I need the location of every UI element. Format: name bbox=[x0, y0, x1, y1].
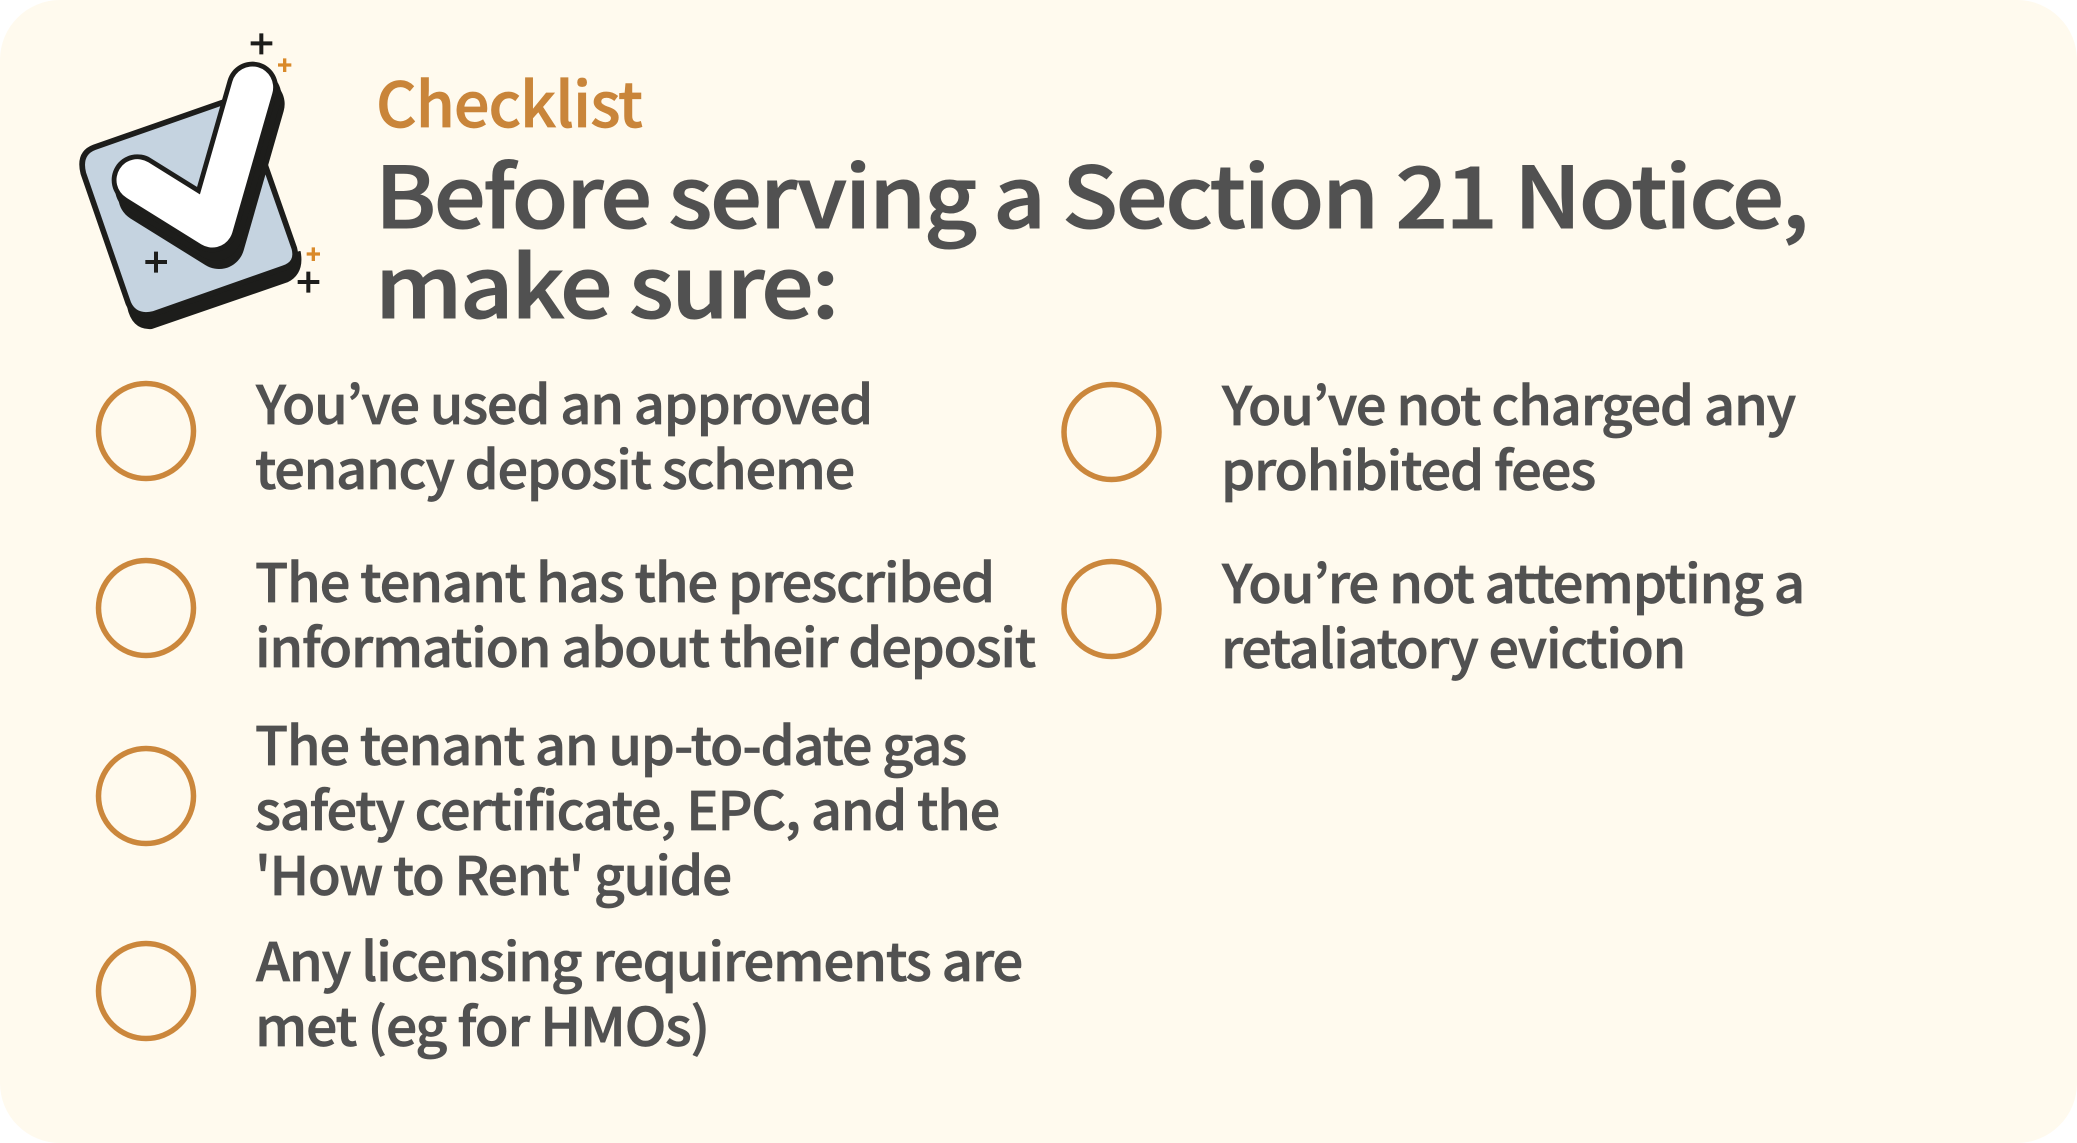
title bbox=[375, 130, 1807, 343]
checklist item: prohibited fees: prohibited fees bbox=[1221, 430, 1595, 506]
checklist item: licensing: Any licensing requirements are bbox=[256, 921, 1022, 997]
checklist item: deposit scheme: You’ve used an approved bbox=[255, 364, 872, 440]
title: make sure: bbox=[375, 220, 837, 343]
checklist item: prescribed information: information about their deposit bbox=[255, 607, 1036, 683]
title: Before serving a Section 21 Notice, bbox=[375, 130, 1807, 253]
checklist item: prohibited fees: You’ve not charged any bbox=[1221, 365, 1796, 441]
checklist item: prescribed information bbox=[98, 542, 1036, 683]
checklist item: retaliatory eviction bbox=[1064, 543, 1804, 684]
checklist item: deposit scheme: tenancy deposit scheme bbox=[255, 429, 854, 505]
checklist item: licensing bbox=[98, 921, 1022, 1062]
checklist item: retaliatory eviction: retaliatory eviction bbox=[1221, 608, 1685, 684]
checklist item: retaliatory eviction: You’re not attempting a bbox=[1221, 543, 1804, 619]
checklist item: safety documents bbox=[98, 705, 999, 911]
checklist item: licensing: met (eg for HMOs) bbox=[255, 986, 709, 1062]
checklist item: safety documents: The tenant an up-to-date gas bbox=[255, 705, 966, 781]
checklist item: prescribed information: The tenant has the prescribed bbox=[255, 542, 994, 618]
checklist item: deposit scheme bbox=[98, 364, 872, 505]
eyebrow: Checklist: Checklist bbox=[376, 55, 642, 145]
checklist item: prohibited fees bbox=[1064, 365, 1796, 506]
checklist item: safety documents: safety certificate, EPC, and the bbox=[255, 770, 999, 846]
checklist item: safety documents: 'How to Rent' guide bbox=[255, 835, 731, 911]
icon: tilted checkbox with tick bbox=[82, 33, 320, 328]
